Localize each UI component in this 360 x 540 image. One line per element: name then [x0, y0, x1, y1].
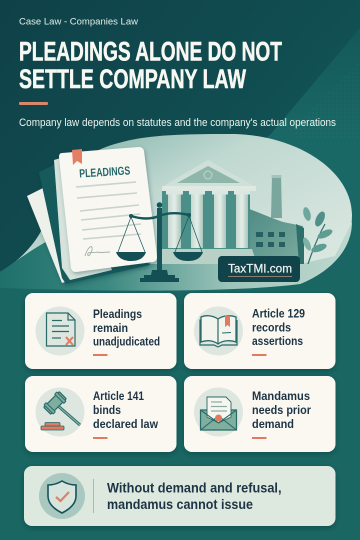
card text: binds: [93, 403, 121, 417]
eyebrow: case law category: Case Law - Companies Law: [19, 16, 138, 28]
title: SETTLE COMPANY LAW: [19, 64, 246, 94]
card text: records: [252, 320, 291, 334]
card: article 129 records assertions: [184, 293, 336, 369]
divider: [92, 479, 94, 513]
accent dash: [252, 437, 266, 439]
banner text: Without demand and refusal,: [107, 480, 282, 496]
signature: [85, 247, 110, 256]
accent rule: [19, 102, 48, 105]
card text: remain: [93, 321, 128, 335]
banner text: mandamus cannot issue: [107, 496, 253, 512]
pleadings page: [59, 147, 157, 272]
card: mandamus needs prior demand: [184, 376, 336, 452]
card text: Article 141: [93, 389, 144, 403]
card text: [93, 389, 159, 431]
plant: [301, 206, 334, 264]
card: article 141 binds declared law: [25, 376, 176, 452]
factory: [247, 175, 304, 264]
bookmark: [72, 149, 82, 165]
card text: Article 129: [252, 306, 305, 320]
accent dash: [252, 354, 266, 356]
document stack: [27, 157, 150, 284]
icon: shield with check: [39, 473, 85, 519]
pleadings label: PLEADINGS: [79, 163, 131, 180]
card text: declared law: [93, 417, 159, 431]
card text: demand: [252, 417, 294, 431]
icon: gavel: [36, 388, 84, 436]
brand badge: TaxTMI.com: TaxTMI.com: [228, 264, 292, 276]
accent dash: [93, 437, 108, 439]
card text: assertions: [252, 334, 303, 348]
icon: envelope: [194, 388, 243, 436]
courthouse: [150, 160, 258, 264]
card text: needs prior: [252, 403, 311, 417]
icon: open book: [194, 306, 243, 356]
subtitle: Company law depends on statutes and the company's actual operations: [19, 117, 337, 129]
scales of justice: [116, 202, 203, 282]
card text: [252, 389, 311, 431]
brand badge: TaxTMI.com: [218, 256, 300, 282]
hero backdrop oval: [0, 134, 352, 288]
icon: document with cross: [36, 306, 84, 356]
card text: unadjudicated: [93, 334, 160, 348]
card text: [252, 306, 305, 348]
title: [19, 36, 282, 94]
banner text: [107, 480, 282, 512]
hero illustration: [0, 134, 352, 291]
card text: [93, 307, 160, 348]
card text: Pleadings: [93, 307, 142, 321]
accent dash: [93, 354, 108, 356]
card: pleadings remain unadjudicated: [25, 293, 176, 369]
conclusion banner: [24, 466, 336, 526]
ground: [0, 222, 352, 291]
card text: Mandamus: [252, 389, 310, 403]
